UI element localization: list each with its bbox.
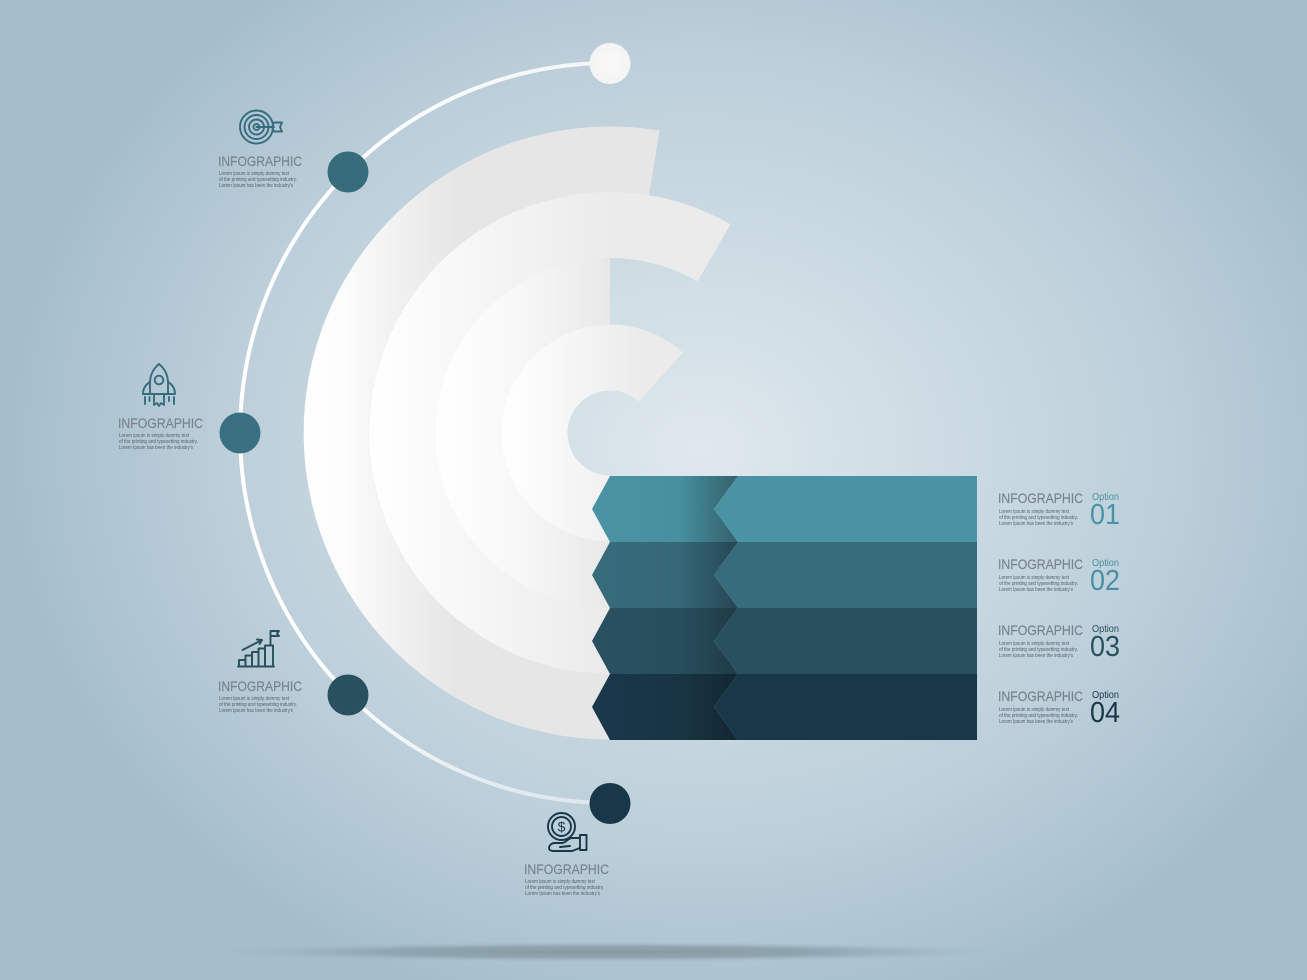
option 01: 01 bbox=[1090, 499, 1120, 531]
arrow bar 1 bbox=[592, 476, 977, 542]
text block: hand with coin: Lorem Ipsum is simply dummy text bbox=[525, 879, 595, 885]
text block: growth chart bbox=[218, 678, 302, 714]
option 04: 04 bbox=[1090, 697, 1120, 729]
option 04 bbox=[998, 688, 1120, 729]
option 03 bbox=[998, 622, 1120, 663]
text block: growth chart: Lorem Ipsum is simply dummy text bbox=[219, 696, 289, 702]
option 01: Lorem Ipsum has been the industry's bbox=[999, 521, 1073, 527]
text block: growth chart: Lorem Ipsum has been the industry's bbox=[219, 708, 293, 714]
icon: hand with coin bbox=[548, 813, 586, 851]
ring 4 bbox=[502, 324, 683, 542]
text block: target bbox=[218, 153, 302, 189]
option 03: of the printing and typesetting industry. bbox=[999, 647, 1078, 653]
option 03: Option bbox=[1092, 624, 1119, 635]
ring 1 bbox=[304, 127, 660, 739]
text block: rocket: of the printing and typesetting industry. bbox=[119, 439, 198, 445]
outer timeline arc bbox=[240, 63, 610, 803]
text block: rocket: Lorem Ipsum has been the industry's bbox=[119, 445, 193, 451]
option 03: Lorem Ipsum has been the industry's bbox=[999, 653, 1073, 659]
timeline node 2 bbox=[220, 412, 260, 454]
arrow bar 3 bbox=[592, 608, 977, 674]
timeline node 4 bbox=[590, 783, 630, 824]
option 01 bbox=[998, 490, 1120, 531]
option 02: INFOGRAPHIC bbox=[998, 556, 1083, 572]
text block: rocket: Lorem Ipsum is simply dummy text bbox=[119, 433, 189, 439]
option 01: Option bbox=[1092, 492, 1119, 503]
option 01: INFOGRAPHIC bbox=[998, 490, 1083, 506]
text block: rocket: INFOGRAPHIC bbox=[118, 415, 203, 431]
arrow bars bbox=[592, 476, 977, 740]
icon: rocket bbox=[143, 364, 175, 406]
arrow bar 2 bbox=[592, 542, 977, 608]
option 02: of the printing and typesetting industry. bbox=[999, 581, 1078, 587]
option 04: Lorem Ipsum has been the industry's bbox=[999, 719, 1073, 725]
text block: hand with coin: of the printing and typesetting industry. bbox=[525, 885, 604, 891]
option 01: of the printing and typesetting industry. bbox=[999, 515, 1078, 521]
timeline node 3 bbox=[328, 674, 368, 716]
option 02 bbox=[998, 556, 1120, 597]
option 03: INFOGRAPHIC bbox=[998, 622, 1083, 638]
text block: growth chart: INFOGRAPHIC bbox=[218, 678, 302, 694]
text block: target: INFOGRAPHIC bbox=[218, 153, 302, 169]
option 02: Option bbox=[1092, 558, 1119, 569]
icon: target bbox=[240, 110, 282, 144]
option 03: 03 bbox=[1090, 631, 1120, 663]
text block: rocket bbox=[118, 415, 203, 451]
option 04: of the printing and typesetting industry. bbox=[999, 713, 1078, 719]
option 04: Lorem Ipsum is simply dummy text bbox=[999, 707, 1069, 713]
text block: target: of the printing and typesetting industry. bbox=[219, 177, 297, 183]
icon: hand with coin: $ bbox=[558, 818, 566, 834]
timeline node: top bbox=[590, 43, 630, 84]
option 02: Lorem Ipsum has been the industry's bbox=[999, 587, 1073, 593]
option 04: Option bbox=[1092, 690, 1119, 701]
option 02: 02 bbox=[1090, 565, 1120, 597]
option 02: Lorem Ipsum is simply dummy text bbox=[999, 575, 1069, 581]
ring 2 bbox=[369, 192, 730, 674]
semicircular ring chart bbox=[304, 127, 730, 739]
text block: hand with coin: INFOGRAPHIC bbox=[524, 861, 609, 877]
ring 3 bbox=[435, 258, 610, 608]
icon: growth chart bbox=[238, 631, 279, 666]
text block: target: Lorem Ipsum has been the industry's bbox=[219, 183, 293, 189]
ground shadow bbox=[212, 942, 1002, 962]
text block: hand with coin bbox=[524, 861, 609, 897]
text block: target: Lorem Ipsum is simply dummy text bbox=[219, 171, 289, 177]
text block: growth chart: of the printing and typesetting industry. bbox=[219, 702, 297, 708]
option 04: INFOGRAPHIC bbox=[998, 688, 1083, 704]
option 01: Lorem Ipsum is simply dummy text bbox=[999, 509, 1069, 515]
option 03: Lorem Ipsum is simply dummy text bbox=[999, 641, 1069, 647]
timeline node 1 bbox=[328, 152, 368, 192]
text block: hand with coin: Lorem Ipsum has been the industry's bbox=[525, 891, 600, 897]
arrow bar 4 bbox=[592, 674, 977, 740]
